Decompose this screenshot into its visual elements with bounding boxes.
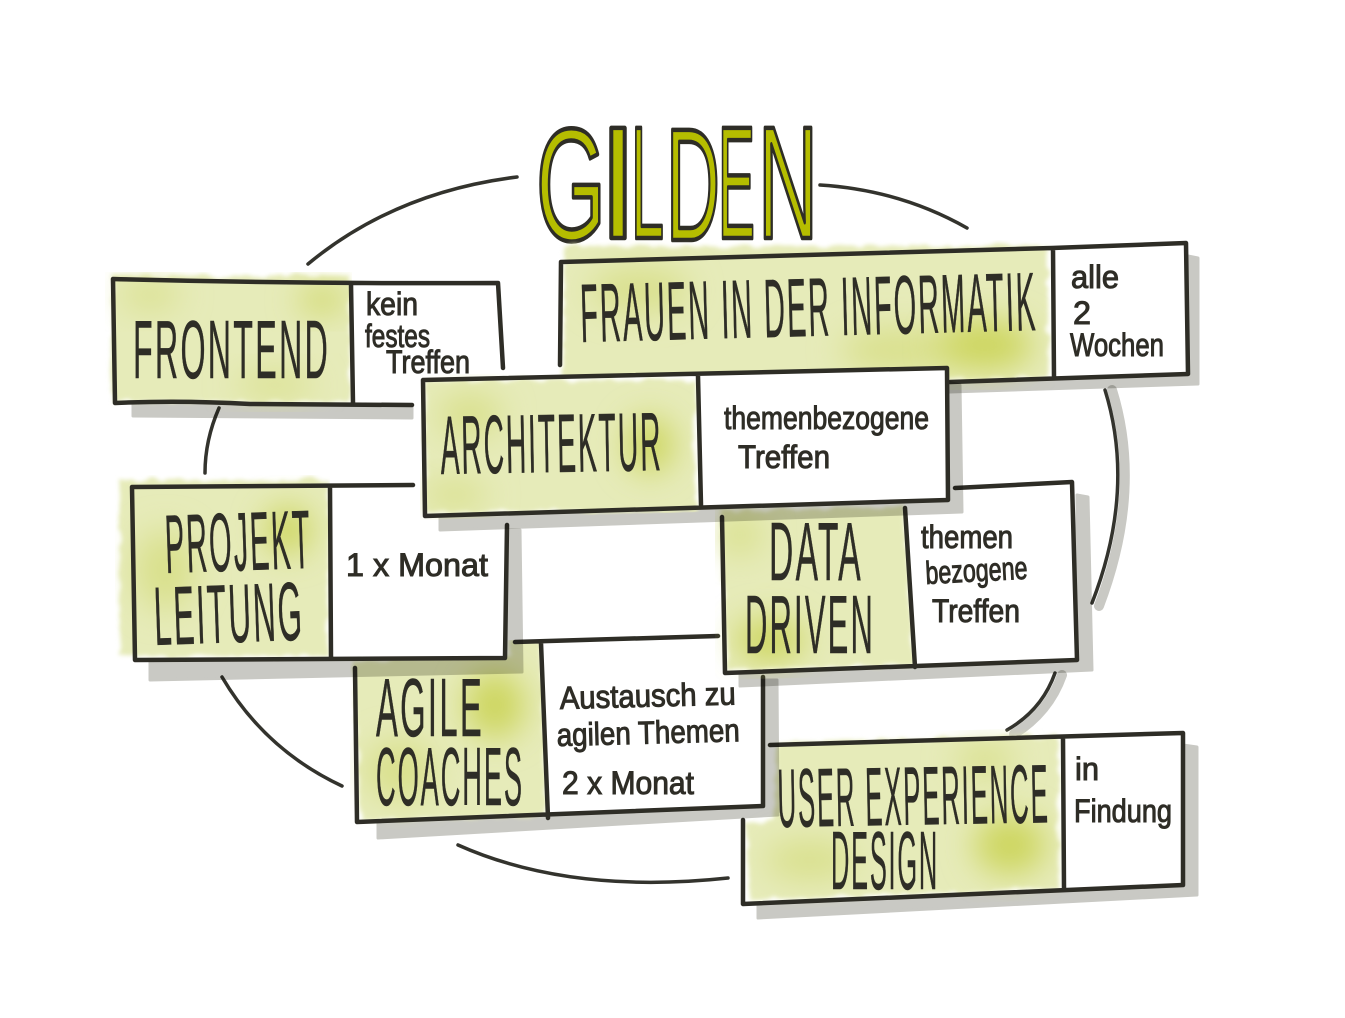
panel: Data Driven (718, 482, 1092, 686)
panel: Frontend (112, 276, 503, 418)
panel: Frauen in der Informatik (560, 243, 1198, 392)
note (1070, 259, 1164, 363)
panel: Architektur (423, 368, 962, 530)
note (365, 286, 470, 380)
note: Treffen (932, 593, 1020, 629)
panel: Frontend: FRONTEND (133, 303, 330, 396)
note: themen (921, 519, 1013, 555)
panel: Data Driven: DRIVEN (745, 578, 875, 671)
note: agilen Themen (556, 712, 740, 753)
heading: AGILE (376, 661, 484, 754)
note: 2 x Monat (562, 765, 694, 801)
title: G (536, 95, 606, 274)
panel: Projektleitung: PROJEKT (163, 493, 314, 591)
note: Treffen (386, 344, 470, 380)
panel: Agile Coaches (352, 636, 778, 838)
note: 1 x Monat (346, 547, 488, 583)
title: E (718, 93, 755, 272)
panel: Projektleitung: LEITUNG (152, 565, 306, 663)
note (921, 519, 1028, 629)
note: Wochen (1070, 327, 1164, 363)
panel: Data Driven: DATA (769, 505, 863, 598)
note (556, 675, 740, 801)
panel: Projektleitung (120, 480, 522, 680)
note (724, 400, 929, 475)
note: festes (365, 318, 430, 354)
note: themenbezogene (724, 400, 929, 436)
heading (745, 505, 875, 671)
note: in (1075, 751, 1099, 787)
note (1074, 751, 1172, 829)
note: Austausch zu (559, 675, 736, 716)
title: N (758, 93, 818, 272)
title: L (631, 93, 664, 272)
note: kein (366, 286, 418, 322)
circle arc: connecting ring (205, 177, 1125, 882)
title: D (666, 95, 720, 274)
heading (152, 493, 314, 663)
note: bezogene (924, 550, 1028, 591)
note: alle (1071, 259, 1119, 295)
heading (777, 747, 1050, 907)
panel: Agile Coaches: COACHES (376, 730, 524, 823)
title: I (598, 93, 638, 272)
note: Findung (1074, 793, 1172, 829)
panel: Architektur: ARCHITEKTUR (440, 395, 663, 492)
panel: User Experience Design (743, 733, 1197, 918)
title (536, 93, 818, 274)
note: Treffen (738, 439, 830, 475)
heading: DESIGN (831, 814, 939, 907)
heading (376, 661, 524, 823)
note: 2 (1073, 295, 1091, 331)
